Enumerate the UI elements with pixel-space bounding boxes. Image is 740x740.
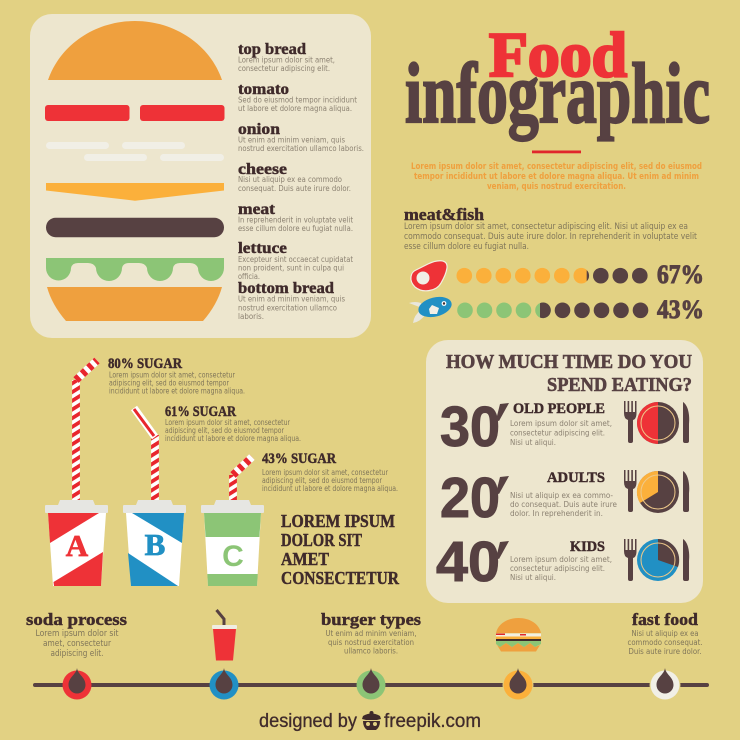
text: lettuce: officia.	[238, 271, 260, 281]
timeline	[33, 668, 709, 700]
cup C	[201, 500, 264, 586]
text: top bread: consectetur adipiscing elit.	[238, 63, 330, 73]
footer credit: freepik.com	[384, 711, 481, 732]
text: 43% sugar: 43% SUGAR	[262, 451, 336, 467]
text: onion: nostrud exercitation ullamco laboris.	[238, 143, 364, 153]
row: adults 20 minutes: 20	[440, 466, 500, 530]
icon: plate half red	[637, 402, 679, 444]
text: fast food: Nisi ut aliquip ex ea	[632, 629, 699, 638]
text: lorem ipsum callout: LOREM IPSUM	[281, 511, 395, 531]
text: burger types: burger types	[321, 610, 421, 629]
text: 80% sugar: adipiscing elit, sed do eiusmod tempor	[109, 378, 230, 388]
footer credit	[259, 711, 481, 732]
text: lettuce: non proident, sunt in culpa qui	[238, 262, 344, 272]
icon: tomato	[45, 105, 224, 121]
text: meat and fish description	[404, 221, 697, 252]
text: tomato: tomato	[238, 81, 289, 98]
text: bottom bread: nostrud exercitation ullamco	[238, 302, 337, 312]
icon: lettuce	[46, 258, 224, 281]
text: 80% sugar: Lorem ipsum dolor sit amet, consectetur	[109, 370, 236, 380]
text: 43% sugar: incididunt ut labore et dolore magna aliqua.	[262, 484, 398, 493]
text: lorem ipsum callout: AMET	[281, 549, 329, 569]
text: lettuce: Excepteur sint occaecat cupidatat	[238, 254, 354, 264]
row: kids 40 minutes: 40	[436, 530, 500, 594]
text: top bread: top bread	[238, 41, 306, 58]
text: fast food: fast food	[632, 610, 699, 629]
icon: knife	[683, 402, 689, 443]
text: cheese	[238, 161, 351, 193]
icon: fork	[624, 470, 636, 512]
text: soda process: amet, consectetur	[43, 639, 111, 649]
straw: cup C	[233, 457, 252, 502]
text: bottom bread: Ut enim ad minim veniam, quis	[238, 294, 345, 304]
intro text: tempor incididunt ut labore et dolore magna aliqua. Ut enim ad minim	[414, 171, 699, 181]
text: meat: meat	[238, 201, 276, 218]
text: burger types: Ut enim ad minim veniam,	[326, 629, 416, 638]
row: kids 40 minutes: consectetur adipiscing elit.	[510, 563, 605, 573]
text: 61% sugar: Lorem ipsum dolor sit amet, consectetur	[165, 418, 291, 427]
text: soda process: adipiscing elit.	[50, 649, 104, 659]
icon: fork	[624, 539, 636, 581]
text: meat: esse cillum dolore eu fugiat nulla.	[238, 223, 353, 233]
icon: freepik logo	[362, 711, 381, 730]
title underline	[532, 150, 581, 153]
icon: burger	[496, 618, 541, 652]
text: burger types: quis nostrud exercitation	[328, 638, 414, 647]
footer credit: designed by	[259, 711, 357, 732]
panel: burger anatomy	[30, 14, 371, 338]
cup C: C	[222, 540, 244, 573]
value: 67%: 67%	[657, 260, 704, 289]
straw: cup A	[76, 360, 97, 502]
row: adults 20 minutes: do consequat. Duis aute irure	[510, 499, 617, 509]
row: adults 20 minutes: Nisi ut aliquip ex ea commo-	[510, 490, 613, 500]
text: bottom bread	[238, 280, 345, 321]
icon: fork	[624, 401, 636, 443]
text: bottom bread: laboris.	[238, 311, 264, 321]
row: kids 40 minutes: Nisi ut aliqui.	[510, 572, 556, 582]
text: tomato: Sed do eiusmod tempor incididunt	[238, 94, 358, 104]
text: 43% sugar	[262, 451, 398, 493]
icon: plate one third orange	[637, 471, 679, 513]
text: lorem ipsum callout	[281, 511, 400, 588]
row: adults 20 minutes	[440, 466, 689, 530]
text: burger types: ullamco laboris.	[344, 646, 398, 656]
row: old people 30 minutes	[440, 395, 689, 459]
text: 61% sugar	[165, 404, 301, 443]
panel: meat and fish	[404, 205, 704, 324]
icon: steak	[411, 261, 447, 291]
icon: plate blue	[637, 539, 679, 581]
row: kids 40 minutes	[436, 530, 689, 594]
text: 43% sugar: adipiscing elit, sed do eiusmod tempor	[262, 476, 383, 485]
dot chart: 67 percent	[456, 268, 648, 284]
text: cheese: cheese	[238, 161, 287, 178]
text: 61% sugar: adipiscing elit, sed do eiusmod tempor	[165, 426, 285, 435]
straw: cup B	[134, 408, 155, 502]
title: Food	[489, 19, 627, 90]
text: 80% sugar	[108, 356, 245, 396]
text: meat: In reprehenderit in voluptate velit	[238, 214, 354, 224]
row: adults 20 minutes: ADULTS	[547, 470, 605, 486]
text: lorem ipsum callout: CONSECTETUR	[281, 568, 400, 588]
text: 80% sugar: incididunt ut labore et dolore magna aliqua.	[109, 386, 245, 396]
cup A: A	[66, 528, 89, 563]
icon: bottom bread	[47, 287, 222, 321]
text: soda process	[26, 610, 127, 659]
icon: soda cup	[212, 610, 237, 660]
row: old people 30 minutes: consectetur adipiscing elit.	[510, 428, 605, 438]
text: onion: Ut enim ad minim veniam, quis	[238, 134, 345, 144]
text: soda process: Lorem ipsum dolor sit	[36, 629, 119, 639]
heading: meat&fish: meat&fish	[404, 205, 485, 224]
text: 61% sugar: incididunt ut labore et dolore magna aliqua.	[165, 434, 301, 443]
text: fast food: Duis aute irure dolor.	[628, 647, 702, 656]
row: kids 40 minutes: Lorem ipsum dolor sit amet,	[510, 554, 612, 564]
text: lettuce	[238, 240, 354, 281]
text: tomato	[238, 81, 358, 113]
node: red	[62, 668, 92, 700]
text: 43% sugar: Lorem ipsum dolor sit amet, consectetur	[262, 468, 389, 477]
icon: onion	[46, 142, 224, 161]
icon: meat	[46, 218, 224, 237]
heading: how much time	[446, 351, 692, 396]
icon: cheese	[46, 183, 224, 201]
panel: time spent eating	[426, 340, 703, 603]
text: cheese: consequat. Duis aute irure dolor.	[238, 183, 351, 193]
cup A	[45, 500, 108, 586]
text: 80% sugar: 80% SUGAR	[108, 356, 182, 372]
icon: knife	[683, 539, 689, 581]
heading: how much time: SPEND EATING?	[547, 374, 692, 396]
heading: how much time: HOW MUCH TIME DO YOU	[446, 351, 692, 373]
row: old people 30 minutes: OLD PEOPLE	[513, 401, 605, 417]
text: top bread: Lorem ipsum dolor sit amet,	[238, 54, 335, 64]
icon: fish	[409, 294, 454, 323]
node: green	[356, 668, 386, 700]
cup B: B	[145, 527, 165, 562]
node: blue	[210, 668, 238, 700]
text: onion: onion	[238, 121, 280, 138]
text: fast food: commodo consequat.	[628, 638, 702, 647]
text: fast food	[628, 610, 702, 656]
row: kids 40 minutes: KIDS	[570, 539, 605, 555]
text: meat and fish description: esse cillum dolore eu fugiat nulla.	[404, 241, 529, 252]
node: white	[650, 668, 680, 700]
text: lorem ipsum callout: DOLOR SIT	[281, 530, 362, 550]
text: bottom bread: bottom bread	[238, 280, 334, 297]
text: lettuce: lettuce	[238, 240, 287, 257]
text: cheese: Nisi ut aliquip ex ea commodo	[238, 174, 342, 184]
row: adults 20 minutes: dolor. In reprehenderit in.	[510, 508, 603, 518]
text: soda process: soda process	[26, 610, 127, 629]
dot chart: 43 percent	[457, 302, 648, 318]
row: old people 30 minutes: Nisi ut aliqui.	[510, 437, 556, 447]
row: old people 30 minutes: 30	[440, 395, 500, 459]
intro text	[411, 161, 702, 191]
text: tomato: ut labore et dolore magna aliqua.	[238, 103, 352, 113]
cup B	[123, 500, 186, 586]
intro text: veniam, quis nostrud exercitation.	[487, 181, 626, 191]
value: 43%: 43%	[657, 295, 704, 324]
icon: knife	[683, 471, 689, 512]
row: old people 30 minutes: Lorem ipsum dolor sit amet,	[510, 418, 612, 428]
node: orange	[502, 668, 534, 700]
icon: top bread	[48, 21, 222, 80]
text: top bread	[238, 41, 335, 73]
text: 61% sugar: 61% SUGAR	[165, 404, 236, 420]
text: burger types	[321, 610, 421, 656]
text: meat	[238, 201, 354, 233]
text: onion	[238, 121, 364, 153]
